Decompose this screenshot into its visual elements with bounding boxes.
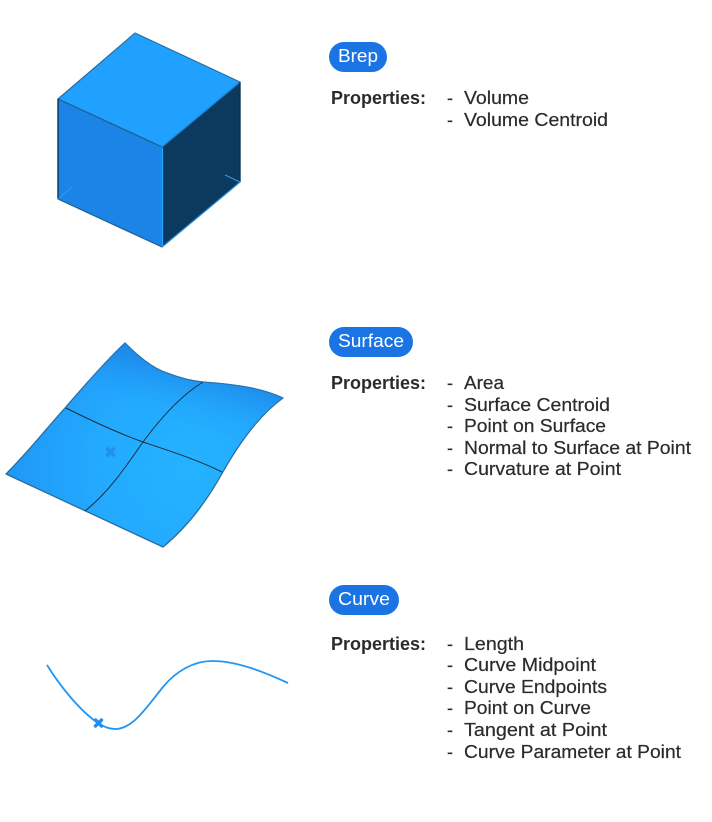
text block: Brep properties: - [447, 88, 453, 108]
text block: Curve properties [331, 634, 681, 762]
cube right face [162, 82, 240, 247]
text block: Brep properties: Volume Centroid [464, 110, 608, 130]
text block: Brep properties: Volume [464, 88, 529, 108]
icon: surface patch [6, 343, 283, 547]
text block: Curve properties: Tangent at Point [464, 720, 607, 740]
text block: Curve properties: Point on Curve [464, 698, 591, 718]
curve line [47, 661, 288, 729]
surface isocurves [66, 408, 222, 472]
text block: Surface properties: - [447, 373, 453, 393]
icon: curve point marker [96, 720, 102, 726]
text block: Curve properties: Curve Parameter at Point [464, 742, 681, 762]
text block: Curve properties: - [447, 634, 453, 654]
text block: Surface properties: Area [464, 373, 505, 393]
surface upper shading [6, 343, 283, 547]
text block: Curve properties: - [447, 720, 453, 740]
heading pill: Brep: Brep [338, 46, 378, 66]
surface body [6, 343, 283, 547]
text block: Surface properties [331, 373, 691, 479]
text block: Curve properties: Properties: [331, 634, 426, 654]
heading pill: Curve: Curve [338, 589, 390, 609]
text block: Surface properties: Curvature at Point [464, 459, 621, 479]
heading pill: Surface [329, 327, 413, 357]
text block: Curve properties: Curve Midpoint [464, 655, 596, 675]
cube left face [58, 99, 162, 247]
icon: brep cube [58, 33, 240, 247]
heading pill: Curve [329, 585, 399, 615]
heading pill: Brep [329, 42, 387, 72]
text block: Curve properties: - [447, 655, 453, 675]
text block: Surface properties: Normal to Surface at Point [464, 438, 691, 458]
text block: Curve properties: Length [464, 634, 524, 654]
text block: Surface properties: - [447, 459, 453, 479]
text block: Surface properties: Properties: [331, 373, 426, 393]
text block: Surface properties: Surface Centroid [464, 395, 610, 415]
text block: Surface properties: - [447, 416, 453, 436]
text block: Curve properties: - [447, 698, 453, 718]
text block: Surface properties: - [447, 395, 453, 415]
heading pill: Surface: Surface [338, 331, 404, 351]
text block: Curve properties: - [447, 742, 453, 762]
text block: Brep properties: - [447, 110, 453, 130]
icon: surface point marker [108, 449, 114, 455]
text block: Brep properties: Properties: [331, 88, 426, 108]
text block: Surface properties: Point on Surface [464, 416, 606, 436]
text block: Surface properties: - [447, 438, 453, 458]
icon: curve with point [47, 661, 288, 729]
cube top face [58, 33, 240, 147]
text block: Curve properties: Curve Endpoints [464, 677, 607, 697]
text block: Brep properties [331, 88, 608, 130]
text block: Curve properties: - [447, 677, 453, 697]
